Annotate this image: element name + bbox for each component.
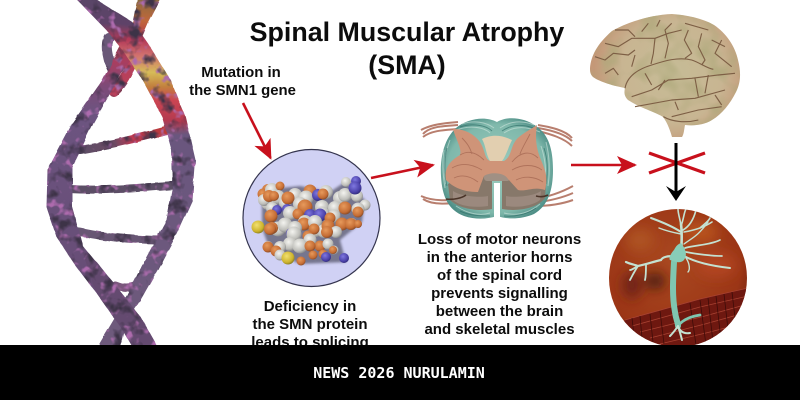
footer bar [0, 345, 800, 400]
icon: brain [590, 14, 740, 137]
arrow: mutation to protein [243, 103, 270, 158]
text: loss of motor neurons: prevents signalling [431, 285, 568, 302]
spinal cord cross-section [421, 118, 573, 220]
panel: SMN protein molecule [243, 150, 380, 286]
salmon butterfly grey matter [446, 125, 546, 192]
text: SMN protein deficiency: the SMN protein [252, 316, 368, 333]
arrow: protein to spinal cord [371, 165, 433, 178]
text: loss of motor neurons: and skeletal muscles [424, 321, 575, 338]
text: SMN protein deficiency: Deficiency in [264, 298, 356, 315]
striated muscle fibre [624, 288, 746, 345]
neuron axon [673, 262, 700, 326]
DNA double helix [47, 0, 195, 347]
text: loss of motor neurons: between the brain [436, 303, 563, 320]
DNA strands and rungs [47, 0, 195, 347]
anterior median fissure [494, 183, 500, 220]
title [250, 17, 564, 80]
white matter [441, 118, 553, 219]
title: (SMA) [368, 50, 446, 80]
arrow: spinal cord to blocked signal [571, 164, 635, 166]
text: mutation label [189, 65, 296, 99]
arrow: brain to muscle neuron [666, 143, 686, 201]
title: Spinal Muscular Atrophy [250, 17, 564, 47]
brain sulci [595, 20, 735, 122]
nerve roots [421, 122, 573, 206]
footer text: NEWS 2026 NURULAMIN [313, 364, 485, 382]
text: SMN protein deficiency: leads to splicing [251, 334, 369, 351]
neuron dendrites [626, 209, 730, 340]
molecule spheres [252, 176, 370, 266]
blurred muscle blotches [622, 222, 736, 299]
ventral roots in horns [446, 195, 548, 199]
ventral grey horns [448, 176, 492, 210]
text: loss of motor neurons: in the anterior horns [427, 249, 572, 266]
panel: motor neuron on skeletal muscle [609, 209, 748, 350]
text: loss of motor neurons: of the spinal cord [437, 267, 562, 284]
text: mutation label: Mutation in [201, 65, 281, 81]
text: SMN protein deficiency [251, 298, 369, 351]
icon: blocked signal cross [649, 153, 705, 173]
text: loss of motor neurons [418, 231, 581, 338]
neuron cell body [669, 243, 686, 262]
text: loss of motor neurons: Loss of motor neurons [418, 231, 581, 248]
text: mutation label: the SMN1 gene [189, 83, 296, 99]
